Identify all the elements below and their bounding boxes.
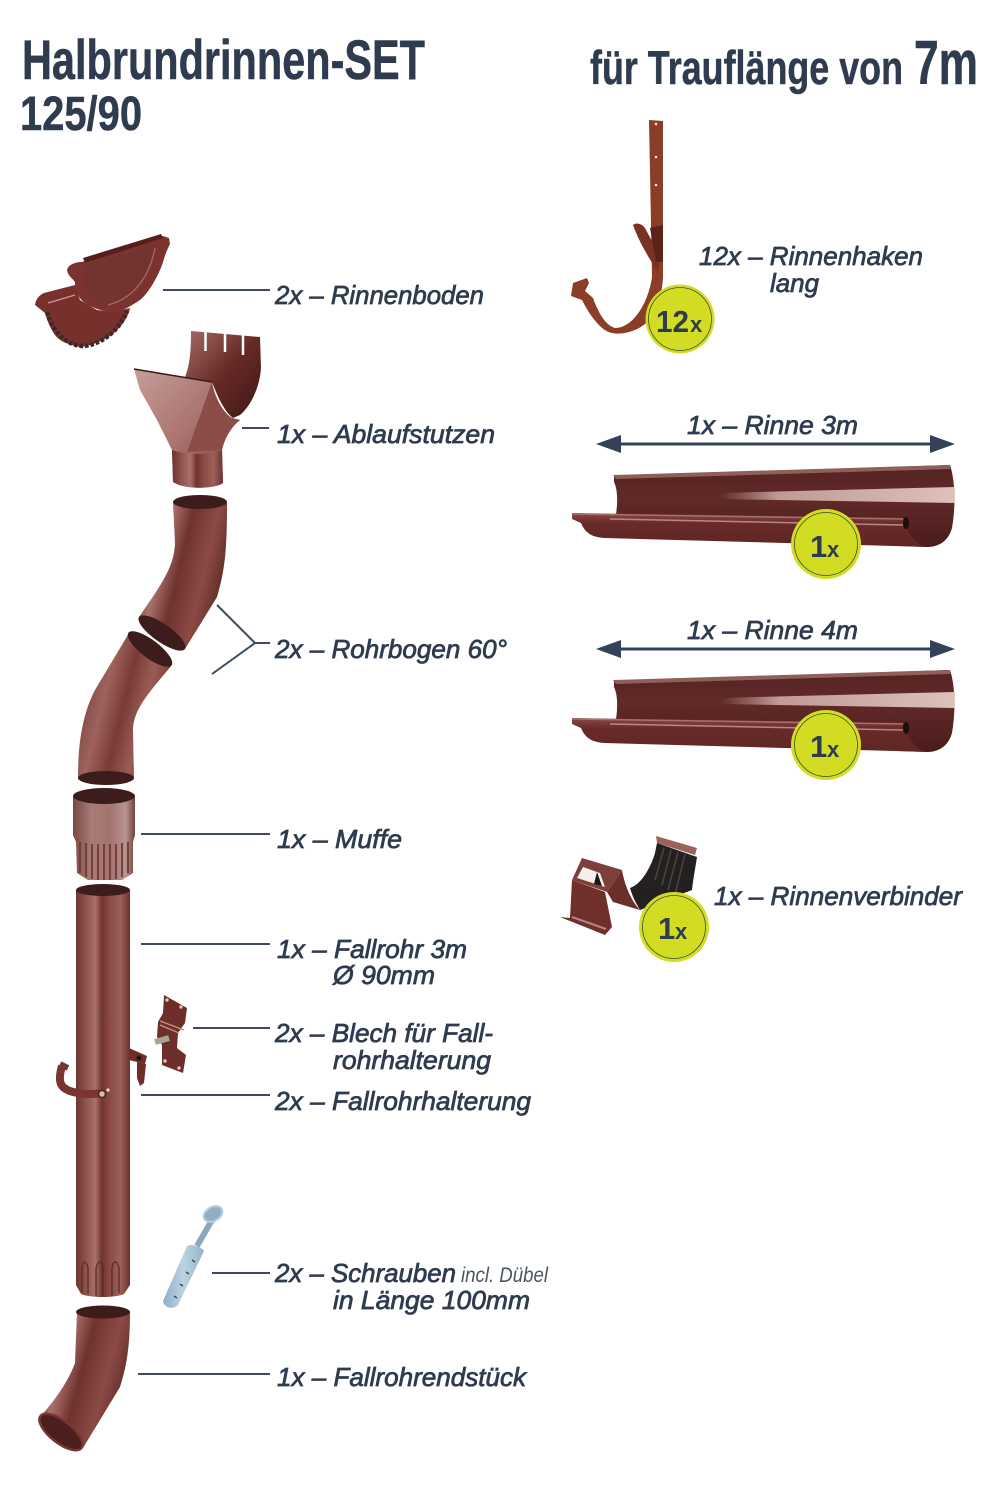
label: Ablaufstutzen: 1x – Ablaufstutzen [277,419,495,449]
leader line: Fallrohr [141,943,270,945]
part: Schraube mit Dübel [163,1203,225,1308]
label: Rinnenverbinder: 1x – Rinnenverbinder [714,881,963,911]
leader line: Ablaufstutzen [242,427,269,429]
part: Fallrohrhalterung [60,1048,147,1098]
label: Schrauben: in Länge 100mm [333,1285,530,1315]
badge: 1x Rinnenverbinder [639,892,709,962]
badge: 1x Rinne 4m: 1 [810,729,827,764]
part: Rinne 4m [572,670,955,752]
badge: 1x Rinne 3m [791,509,861,579]
part: Rinne 3m [572,465,955,547]
part: Rohrbogen 60° lower [78,626,177,785]
badge: 1x Rinne 4m: x [827,737,840,762]
part: Ablaufstutzen [134,331,261,488]
leader line: Muffe [141,833,270,835]
badge: 1x Rinnenverbinder: 1 [658,911,675,946]
badge: 1x Rinne 3m: x [827,537,840,562]
label: Fallrohr: 1x – Fallrohr 3m [277,934,467,964]
heading: für Trauflänge von 7m: für Trauflänge von [590,41,903,94]
leader line: Fallrohrendstück [138,1373,270,1375]
part: Muffe [73,788,135,880]
part: Rinnenverbinder [560,836,697,935]
label: Rinnenboden: 2x – Rinnenboden [274,280,484,310]
part: Rinnenhaken [571,120,663,334]
leader line: Blech [193,1027,270,1029]
part: Fallrohr [76,884,130,1297]
badge: 12x: 12 [656,304,689,339]
label: Rinne 3m: 1x – Rinne 3m [687,410,858,440]
label: Rinnenhaken [699,241,923,298]
label: Blech für Fallrohrhalterung: rohrhalterung [333,1045,492,1075]
label: Rinnenhaken: 12x – Rinnenhaken [699,241,923,271]
label: Schrauben: 2x – Schrauben [274,1258,456,1288]
label: Blech für Fallrohrhalterung [274,1018,493,1075]
badge: 12x [646,284,714,354]
arrow: length Rinne 4m [596,640,955,658]
part: Fallrohrendstück [34,1306,130,1457]
label: Schrauben: incl. Dübel [461,1264,549,1287]
subtitle: 125/90: 125/90 [20,88,142,141]
leader bracket: Rohrbogen [212,605,270,674]
label: Rohrbogen: 2x – Rohrbogen 60° [274,634,507,664]
label: Blech für Fallrohrhalterung: 2x – Blech für Fall- [274,1018,493,1048]
title: Halbrundrinnen-SET: Halbrundrinnen-SET [22,28,425,91]
label: Fallrohr [277,934,467,990]
part: Rohrbogen 60° upper [134,495,227,656]
leader line: Fallrohrhalterung [141,1094,270,1096]
label: Schrauben [274,1258,549,1315]
label: Rinnenhaken: lang [770,268,820,298]
badge: 1x Rinne 4m [791,710,861,780]
part: Rinnenboden [35,234,170,347]
label: Muffe: 1x – Muffe [277,824,402,854]
label: Fallrohrhalterung: 2x – Fallrohrhalterung [274,1086,532,1116]
label: Fallrohr: Ø 90mm [332,960,435,990]
badge: 12x: x [690,312,703,337]
badge: 1x Rinne 3m: 1 [810,529,827,564]
leader line: Rinnenboden [163,289,270,291]
label: Rinne 4m: 1x – Rinne 4m [687,615,858,645]
label: Fallrohrendstück: 1x – Fallrohrendstück [277,1362,528,1392]
badge: 1x Rinnenverbinder: x [675,919,688,944]
leader line: Schrauben [212,1272,270,1274]
arrow: length Rinne 3m [596,435,955,453]
part: Blech für Fallrohrhalterung [155,995,187,1073]
